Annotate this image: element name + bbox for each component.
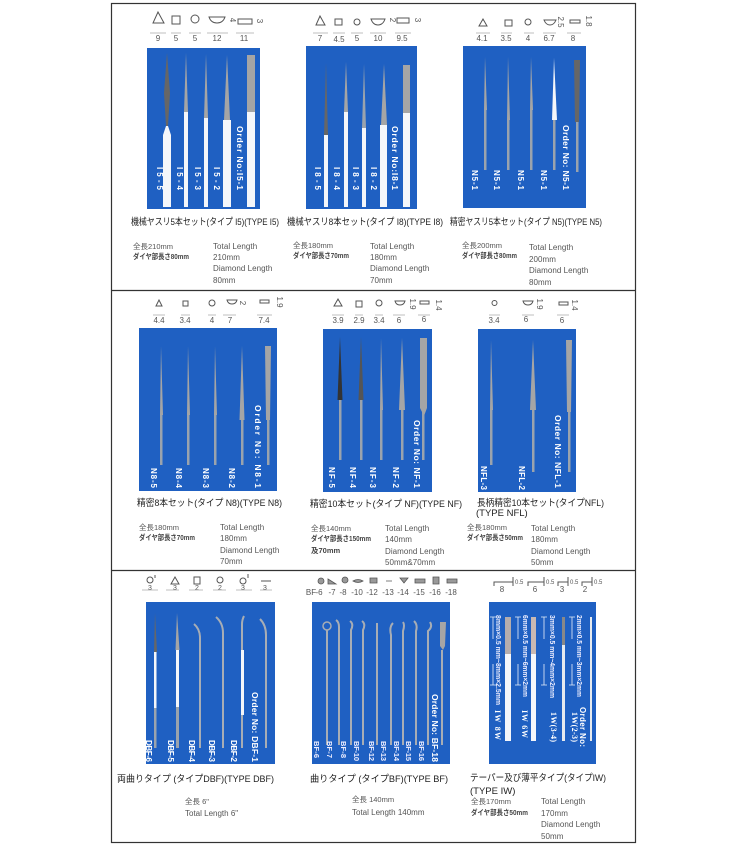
shape icons BF: -18 xyxy=(445,588,457,597)
caption N5: 精密ヤスリ5本セット(タイプ N5)(TYPE N5) xyxy=(450,216,602,228)
shape icons BF: -7 xyxy=(328,588,336,597)
labels I8: I8-5 xyxy=(313,167,322,191)
labels IW: Order No: xyxy=(578,707,587,747)
blue photo I8 xyxy=(306,46,417,209)
labels N8: N8-3 xyxy=(201,468,210,489)
labels BF: BF-15 xyxy=(404,741,413,761)
specs N5: 80mm xyxy=(529,278,552,287)
caption BF: 曲りタイプ (タイプBF)(TYPE BF) xyxy=(310,774,448,785)
shape icons BF: -14 xyxy=(397,588,409,597)
specs N5: ダイヤ部長さ80mm xyxy=(462,250,517,260)
shape icons NF: 1.9 xyxy=(408,298,417,310)
labels NF: NF-3 xyxy=(368,467,377,489)
shape icons I8: 2 xyxy=(388,18,397,23)
labels DBF: DBF-2 xyxy=(229,740,238,763)
labels DBF: DBF-3 xyxy=(207,740,216,763)
specs DBF xyxy=(185,796,238,818)
specs N8: ダイヤ部長さ70mm xyxy=(139,532,195,542)
shape icons N8: 7 xyxy=(228,316,233,325)
shape icons N5: 4.1 xyxy=(476,34,488,43)
shape icons N5 xyxy=(476,15,593,43)
labels NF xyxy=(327,420,422,489)
labels DBF: DBF-6 xyxy=(144,740,153,763)
panel: type NF set xyxy=(310,298,462,567)
shape icons N5: 2.5 xyxy=(556,16,565,28)
labels BF: BF-14 xyxy=(392,741,401,762)
labels IW: 1W(2-3) xyxy=(570,712,579,742)
files I8 xyxy=(324,62,410,207)
shape icons IW: 0.5 xyxy=(515,580,524,586)
specs I5: 80mm xyxy=(213,276,236,285)
labels I5: I5-4 xyxy=(175,167,184,191)
specs NF: Total Length xyxy=(385,524,429,533)
panel: type BF set xyxy=(306,577,457,817)
specs NFL: Total Length xyxy=(531,524,575,533)
specs I5: 全長210mm xyxy=(133,241,173,251)
specs N8 xyxy=(139,522,279,566)
specs BF: 全長 140mm xyxy=(352,794,394,804)
shape icons N8: 7.4 xyxy=(258,316,270,325)
specs I8: 70mm xyxy=(370,276,393,285)
labels N5 xyxy=(470,125,571,191)
specs BF: Total Length 140mm xyxy=(352,808,425,817)
specs IW: ダイヤ部長さ50mm xyxy=(471,807,528,817)
labels IW: 8mm×0.5 mm~8mm×2.5mm xyxy=(494,615,503,705)
labels BF xyxy=(312,694,440,762)
shape icons NF: 3.9 xyxy=(332,316,344,325)
labels IW: 3mm×0.5 mm~4mm×2mm xyxy=(548,615,557,698)
labels DBF: Order No: DBF-1 xyxy=(250,692,260,762)
blue photo NFL xyxy=(478,329,576,492)
labels N5: N5-1 xyxy=(470,170,479,191)
labels BF: BF-6 xyxy=(312,741,321,758)
shape icons NF xyxy=(332,298,443,325)
labels DBF: DBF-5 xyxy=(166,740,175,763)
specs N8: 全長180mm xyxy=(139,522,179,532)
panel: type N8 set xyxy=(137,296,284,566)
labels N8: Order No: N8-1 xyxy=(253,405,263,488)
specs NFL: 全長180mm xyxy=(467,522,507,532)
shape icons BF: -6 xyxy=(315,588,323,597)
shape icons I5: 4 xyxy=(228,18,237,23)
labels NFL: NFL-2 xyxy=(517,466,526,491)
labels BF: BF-7 xyxy=(325,741,334,758)
shape icons DBF: 3 xyxy=(241,585,245,592)
shape icons NFL: 6 xyxy=(524,315,529,324)
labels NFL: NFL-3 xyxy=(479,466,488,491)
shape icons N5: 3.5 xyxy=(500,34,512,43)
shape icons IW xyxy=(494,577,603,594)
specs I5: ダイヤ部長さ80mm xyxy=(133,251,189,261)
shape icons NF: 6 xyxy=(422,315,427,324)
panel: type DBF set xyxy=(117,574,275,818)
caption NFL: (TYPE NFL) xyxy=(476,508,528,519)
specs N5 xyxy=(462,240,588,287)
files N8 xyxy=(160,346,271,465)
labels BF: BF-12 xyxy=(367,741,376,761)
blue photo IW xyxy=(489,602,596,764)
labels I8: I8-3 xyxy=(351,167,360,191)
panel: type N5 set xyxy=(450,15,602,287)
labels IW: IW 6W xyxy=(520,710,529,738)
specs IW: 170mm xyxy=(541,809,568,818)
labels BF: BF-16 xyxy=(417,741,426,761)
specs I5: Total Length xyxy=(213,242,257,251)
labels N8: N8-5 xyxy=(149,468,158,489)
shape icons NFL: 3.4 xyxy=(488,316,500,325)
files NF xyxy=(338,337,427,460)
files N5 xyxy=(484,57,580,172)
shape icons IW: 0.5 xyxy=(594,580,603,586)
labels I8: I8-4 xyxy=(332,167,341,191)
shape icons N8 xyxy=(153,296,284,325)
shape icons NF: 3.4 xyxy=(373,316,385,325)
specs IW: Diamond Length xyxy=(541,820,600,829)
dimension arrows IW xyxy=(490,617,575,685)
labels IW: 6mm×0.5 mm~6mm×2mm xyxy=(521,615,530,697)
panel: type I8 set xyxy=(287,16,443,285)
labels N5: Order No: N5-1 xyxy=(561,125,571,190)
shape icons I5: 5 xyxy=(193,34,198,43)
labels BF: BF-13 xyxy=(379,741,388,761)
panel: type IW set xyxy=(470,577,606,841)
labels IW: 2mm×0.5 mm~3mm×2mm xyxy=(575,615,584,697)
shape icons I8: 3 xyxy=(413,18,422,23)
shape icons N8: 4 xyxy=(210,316,215,325)
specs NF: 全長140mm xyxy=(311,523,351,533)
caption NFL: 長柄精密10本セット(タイプNFL) xyxy=(477,497,604,509)
specs I8: 180mm xyxy=(370,253,397,262)
shape icons I8: 10 xyxy=(374,34,383,43)
caption N8: 精密8本セット(タイプ N8)(TYPE N8) xyxy=(137,497,282,509)
shape icons I8: 9.5 xyxy=(396,34,408,43)
shape icons NFL: 6 xyxy=(560,316,565,325)
labels BF: BF-10 xyxy=(352,741,361,761)
shape icons BF: -8 xyxy=(339,588,347,597)
shape icons BF: -12 xyxy=(366,588,378,597)
specs NF: 及70mm xyxy=(311,546,341,555)
labels N8 xyxy=(149,405,263,489)
specs I8 xyxy=(293,240,429,285)
shape icons NF: 6 xyxy=(397,316,402,325)
caption I5: 機械ヤスリ5本セット(タイプ I5)(TYPE I5) xyxy=(131,216,279,228)
labels DBF: DBF-4 xyxy=(187,740,196,763)
shape icons I5: 5 xyxy=(174,34,179,43)
shape icons IW: 8 xyxy=(500,585,505,594)
blue photo DBF xyxy=(146,602,275,764)
specs IW: 全長170mm xyxy=(471,796,511,806)
caption I8: 機械ヤスリ8本セット(タイプ I8)(TYPE I8) xyxy=(287,216,443,228)
shape icons NF: 2.9 xyxy=(353,316,365,325)
labels IW: 1W(3-4) xyxy=(549,712,558,742)
shape icons N8: 2 xyxy=(238,301,247,306)
shape icons I5 xyxy=(150,12,264,43)
shape icons IW: 0.5 xyxy=(546,580,555,586)
labels I8 xyxy=(313,126,400,191)
labels NFL xyxy=(479,415,563,491)
shape icons BF: -16 xyxy=(429,588,441,597)
shape icons NF: 1.4 xyxy=(434,299,443,311)
specs IW: Total Length xyxy=(541,797,585,806)
specs N5: 200mm xyxy=(529,255,556,264)
shape icons IW: 2 xyxy=(583,585,588,594)
labels I5: I5-3 xyxy=(193,167,202,191)
shape icons N5: 1.8 xyxy=(584,15,593,27)
specs NFL: Diamond Length xyxy=(531,547,590,556)
shape icons BF: BF xyxy=(306,588,316,597)
labels N5: N5-1 xyxy=(516,170,525,191)
blue photo BF xyxy=(312,602,450,764)
labels I8: I8-2 xyxy=(369,167,378,191)
shape icons I5: 9 xyxy=(156,34,161,43)
shape icons DBF xyxy=(142,574,272,592)
specs I8: ダイヤ部長さ70mm xyxy=(293,250,349,260)
specs NF: 140mm xyxy=(385,535,412,544)
specs I5: Diamond Length xyxy=(213,264,272,273)
shape icons IW: 6 xyxy=(533,585,538,594)
specs IW xyxy=(471,796,600,841)
shape icons I8: 4.5 xyxy=(333,35,345,44)
labels BF: BF-8 xyxy=(339,741,348,758)
shape icons NFL xyxy=(488,298,579,325)
labels IW: IW 8W xyxy=(493,710,502,740)
panel: type I5 set xyxy=(131,12,279,285)
specs NF: Diamond Length xyxy=(385,547,444,556)
shape icons I8 xyxy=(313,16,422,44)
specs I8: Total Length xyxy=(370,242,414,251)
shape icons BF: -15 xyxy=(413,588,425,597)
shape icons I5: 12 xyxy=(213,34,222,43)
labels I5: Order No:I5-1 xyxy=(235,126,245,190)
shape icons N5: 4 xyxy=(526,34,531,43)
shape icons DBF: 3 xyxy=(263,585,267,592)
specs N8: 70mm xyxy=(220,557,243,566)
specs I8: 全長180mm xyxy=(293,240,333,250)
labels N8: N8-2 xyxy=(227,468,236,489)
shape icons I5: 11 xyxy=(240,34,249,43)
shape icons N8: 3.4 xyxy=(179,316,191,325)
shape icons N5: 8 xyxy=(571,34,576,43)
shape icons NFL: 1.9 xyxy=(535,298,544,310)
specs N5: Total Length xyxy=(529,243,573,252)
shape icons DBF: 3 xyxy=(173,585,177,592)
shape icons N8: 1.9 xyxy=(275,296,284,308)
specs NFL xyxy=(467,522,590,567)
shape icons BF: -13 xyxy=(382,588,394,597)
files DBF xyxy=(154,613,266,748)
files I5 xyxy=(163,53,255,207)
specs DBF: 全長 6" xyxy=(185,796,209,806)
specs NFL: 50mm xyxy=(531,558,554,567)
shape icons IW: 0.5 xyxy=(570,580,579,586)
specs BF xyxy=(352,794,425,817)
specs I5 xyxy=(133,241,272,285)
caption IW: (TYPE IW) xyxy=(470,786,515,797)
labels N8: N8-4 xyxy=(174,468,183,489)
blue photo N5 xyxy=(463,46,586,208)
shape icons DBF: 3 xyxy=(148,585,152,592)
labels I5: I5-5 xyxy=(155,167,164,191)
shape icons N5: 6.7 xyxy=(543,34,555,43)
shape icons NFL: 1.4 xyxy=(570,299,579,311)
shape icons DBF: 2 xyxy=(195,585,199,592)
labels I5: I5-2 xyxy=(212,167,221,191)
specs NFL: ダイヤ部長さ50mm xyxy=(467,532,523,542)
files NFL xyxy=(490,340,572,472)
specs N8: Diamond Length xyxy=(220,546,279,555)
frame with row dividers xyxy=(111,4,636,842)
labels NF: Order No: NF-1 xyxy=(412,420,422,488)
shape icons BF xyxy=(306,577,457,597)
blue photo N8 xyxy=(139,328,277,491)
specs N5: 全長200mm xyxy=(462,240,502,250)
specs N8: 180mm xyxy=(220,534,247,543)
specs DBF: Total Length 6" xyxy=(185,809,238,818)
panel: type NFL set xyxy=(467,298,604,567)
specs NF xyxy=(311,523,444,567)
files IW xyxy=(505,617,592,741)
labels N5: N5-1 xyxy=(492,170,501,191)
caption IW: テーパー及び薄平タイプ(タイプIW) xyxy=(470,772,606,784)
specs N5: Diamond Length xyxy=(529,266,588,275)
caption DBF: 両曲りタイプ (タイプDBF)(TYPE DBF) xyxy=(117,774,274,785)
labels NF: NF-5 xyxy=(327,467,336,489)
caption NFL xyxy=(476,497,604,519)
shape icons DBF: 2 xyxy=(218,585,222,592)
shape icons I8: 5 xyxy=(355,34,360,43)
shape icons N8: 4.4 xyxy=(153,316,165,325)
caption NF: 精密10本セット(タイプ NF)(TYPE NF) xyxy=(310,498,462,510)
specs N8: Total Length xyxy=(220,523,264,532)
labels NFL: Order No: NFL-1 xyxy=(553,415,563,488)
shape icons IW: 3 xyxy=(560,585,565,594)
caption IW xyxy=(470,772,606,797)
specs NF: ダイヤ部長さ150mm xyxy=(311,533,371,543)
labels NF: NF-2 xyxy=(391,467,400,489)
labels NF: NF-4 xyxy=(348,467,357,489)
specs I5: 210mm xyxy=(213,253,240,262)
labels I5 xyxy=(155,126,245,191)
labels DBF xyxy=(144,692,260,763)
labels N5: N5-1 xyxy=(539,170,548,191)
files BF xyxy=(323,620,446,745)
specs NFL: 180mm xyxy=(531,535,558,544)
shape icons BF: -10 xyxy=(351,588,363,597)
blue photo I5 xyxy=(147,48,260,209)
labels I8: Order No:I8-1 xyxy=(390,126,400,190)
blue photo NF xyxy=(323,329,432,492)
shape icons I5: 3 xyxy=(255,19,264,24)
labels BF: Order No: BF-18 xyxy=(430,694,440,762)
specs I8: Diamond Length xyxy=(370,264,429,273)
specs NF: 50mm&70mm xyxy=(385,558,436,567)
specs IW: 50mm xyxy=(541,832,564,841)
shape icons I8: 7 xyxy=(318,34,323,43)
labels IW xyxy=(493,615,587,747)
